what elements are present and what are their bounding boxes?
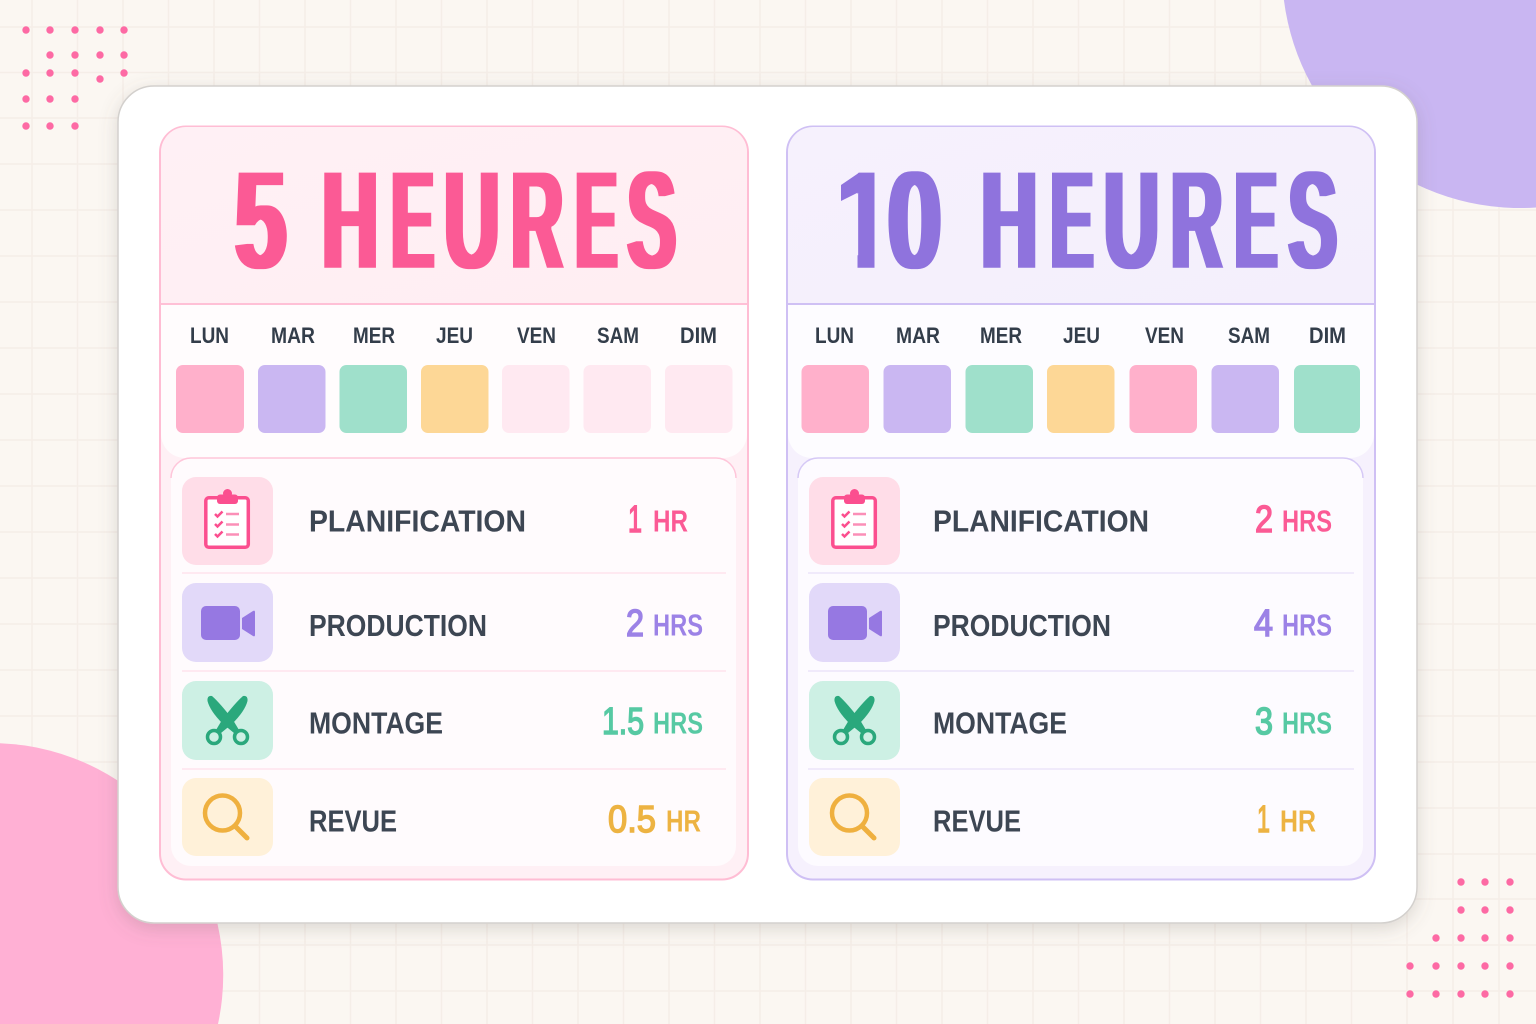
list background xyxy=(171,458,736,866)
value: 1 hr: 1 xyxy=(1257,799,1270,841)
value: 2 hrs: 2 xyxy=(626,603,644,645)
value: 3 hrs xyxy=(1255,701,1332,743)
icon: magnifier xyxy=(809,778,900,856)
day labels: LUN xyxy=(815,323,854,348)
task list xyxy=(798,458,1363,866)
icon: scissors xyxy=(809,681,900,760)
value: 1.5 hrs: HRS xyxy=(653,705,703,740)
day labels: VEN xyxy=(517,323,556,348)
panel background xyxy=(160,126,748,880)
value: 1 hr xyxy=(628,499,688,541)
heading: 10 heures xyxy=(841,171,1338,270)
day labels: DIM xyxy=(1309,323,1346,348)
task list xyxy=(171,458,736,866)
label: PRODUCTION xyxy=(309,608,487,643)
day labels xyxy=(815,323,1346,348)
remaining letters: S xyxy=(1288,141,1337,299)
days area xyxy=(161,304,747,458)
value: 4 hrs: HRS xyxy=(1282,608,1332,643)
panel: 10 heures xyxy=(787,126,1375,880)
value: 0.5 hr xyxy=(608,799,701,841)
icon: magnifier xyxy=(182,778,273,856)
remaining letters: H xyxy=(981,141,1038,299)
heading: 5 heures xyxy=(235,141,676,299)
list background xyxy=(798,458,1363,866)
value: 2 hrs: 2 xyxy=(1255,499,1273,541)
row dividers xyxy=(808,573,1354,769)
day labels: JEU xyxy=(1063,323,1100,348)
row: montage xyxy=(182,681,703,760)
day labels: JEU xyxy=(436,323,473,348)
remaining letters: E xyxy=(1235,141,1277,299)
header divider xyxy=(161,303,747,305)
value: 1.5 hrs: 1.5 xyxy=(602,701,644,743)
main white card xyxy=(118,86,1417,923)
row: production xyxy=(809,583,1332,662)
day labels: SAM xyxy=(597,323,639,348)
heading: 5 heures: U xyxy=(444,141,499,299)
value: 0.5 hr: 0.5 xyxy=(608,799,656,841)
panel background xyxy=(787,126,1375,880)
days area xyxy=(788,304,1374,458)
remaining letters: R xyxy=(1171,141,1222,299)
list top border xyxy=(171,458,736,478)
heading: 5 heures: E xyxy=(391,141,434,299)
row: planification xyxy=(809,477,1332,565)
row: revue xyxy=(182,778,701,856)
decorative pink circle xyxy=(0,743,223,1024)
label: MONTAGE xyxy=(309,706,443,740)
heading: 5 heures: R xyxy=(511,141,563,299)
value: 1 hr: HR xyxy=(1280,804,1316,839)
day labels: LUN xyxy=(190,323,229,348)
label: REVUE xyxy=(933,804,1021,838)
day labels: MAR xyxy=(896,323,940,348)
digit one xyxy=(841,172,874,268)
day labels: MAR xyxy=(271,323,315,348)
icon: scissors xyxy=(182,681,273,760)
value: 4 hrs: 4 xyxy=(1254,603,1273,645)
dot pattern bottom right xyxy=(1406,878,1514,998)
day squares xyxy=(176,365,732,433)
label: MONTAGE xyxy=(933,706,1067,740)
decorative purple circle xyxy=(1284,0,1536,208)
value: 3 hrs: 3 xyxy=(1255,701,1273,743)
remaining letters: E xyxy=(1051,141,1093,299)
value: 2 hrs xyxy=(626,603,703,645)
icon: video camera xyxy=(182,583,273,662)
value: 1.5 hrs xyxy=(602,701,703,743)
day labels: VEN xyxy=(1145,323,1184,348)
row: revue xyxy=(809,778,1316,856)
label: PRODUCTION xyxy=(933,608,1111,643)
value: 0.5 hr: HR xyxy=(666,804,701,839)
header band xyxy=(161,127,747,304)
label: PLANIFICATION xyxy=(309,504,526,538)
day labels: MER xyxy=(353,323,395,348)
value: 1 hr: 1 xyxy=(628,499,642,541)
header band xyxy=(788,127,1374,304)
dot pattern top left xyxy=(22,26,128,130)
icon: clipboard xyxy=(809,477,900,565)
row: montage xyxy=(809,681,1332,760)
remaining letters: 0 xyxy=(888,141,942,299)
value: 4 hrs xyxy=(1254,603,1332,645)
day labels: DIM xyxy=(680,323,717,348)
list top border xyxy=(798,458,1363,478)
remaining letters: U xyxy=(1104,141,1159,299)
day squares xyxy=(802,365,1360,433)
icon: video camera xyxy=(809,583,900,662)
value: 3 hrs: HRS xyxy=(1282,705,1332,740)
label: REVUE xyxy=(309,804,397,838)
row dividers xyxy=(182,573,726,769)
remaining letters xyxy=(888,141,1337,299)
value: 2 hrs xyxy=(1255,499,1332,541)
day labels: SAM xyxy=(1228,323,1270,348)
value: 2 hrs: HRS xyxy=(653,608,703,643)
day labels: MER xyxy=(980,323,1022,348)
heading: 5 heures: H xyxy=(322,141,378,299)
panel: 5 heures xyxy=(160,126,748,880)
icon: clipboard xyxy=(182,477,273,565)
value: 2 hrs: HRS xyxy=(1282,504,1332,538)
value: 1 hr xyxy=(1257,799,1316,841)
heading: 5 heures: S xyxy=(628,141,676,299)
row: planification xyxy=(182,477,688,565)
value: 1 hr: HR xyxy=(653,504,688,538)
header divider xyxy=(788,303,1374,305)
heading: 5 heures: 5 xyxy=(235,141,286,299)
heading: 5 heures: E xyxy=(576,141,617,299)
label: PLANIFICATION xyxy=(933,504,1149,538)
day labels xyxy=(190,323,717,348)
digit one: 1 xyxy=(841,141,889,299)
row: production xyxy=(182,583,703,662)
